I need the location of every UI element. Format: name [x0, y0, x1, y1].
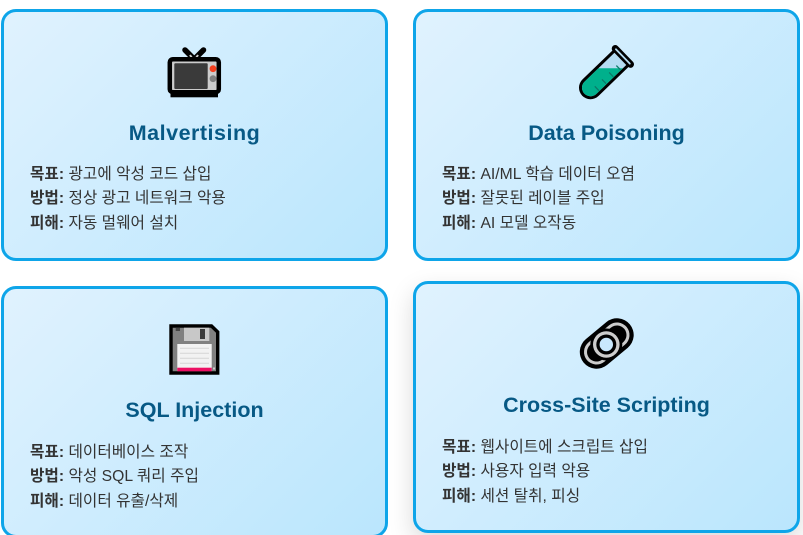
panel: Cross-Site Scripting — [413, 281, 800, 533]
icon: television — [168, 47, 222, 98]
text: SQL Injection details: 방법: 악성 SQL 쿼리 주입 — [30, 468, 199, 485]
text: SQL Injection details — [30, 444, 199, 510]
panel: Data Poisoning — [413, 9, 800, 261]
text: Data Poisoning details: 목표: AI/ML 학습 데이터 오염 — [442, 166, 635, 183]
icon: test tube — [579, 45, 634, 100]
text: Data Poisoning details: 방법: 잘못된 레이블 주입 — [442, 190, 605, 207]
text: Malvertising details — [30, 166, 226, 232]
text: Cross-Site Scripting details: 피해: 세션 탈취, 피싱 — [442, 488, 580, 505]
text: Cross-Site Scripting details — [442, 438, 648, 505]
heading: Malvertising: Malvertising — [129, 121, 260, 145]
icon: chain link — [580, 318, 634, 369]
text: SQL Injection details: 목표: 데이터베이스 조작 — [30, 444, 188, 461]
text: Malvertising details: 방법: 정상 광고 네트워크 악용 — [30, 190, 226, 207]
panel: SQL Injection — [1, 286, 388, 535]
icon: floppy disk — [169, 324, 220, 375]
panel: Malvertising — [1, 9, 388, 261]
text: Data Poisoning details: 피해: AI 모델 오작동 — [442, 215, 576, 232]
heading: Cross-Site Scripting: Cross-Site Scripting — [503, 393, 710, 417]
text: Cross-Site Scripting details: 방법: 사용자 입력 악용 — [442, 463, 590, 480]
text: Malvertising details: 목표: 광고에 악성 코드 삽입 — [30, 166, 211, 183]
heading: Data Poisoning: Data Poisoning — [528, 121, 685, 145]
text: Data Poisoning details — [442, 166, 635, 232]
text: SQL Injection details: 피해: 데이터 유출/삭제 — [30, 493, 178, 510]
text: Cross-Site Scripting details: 목표: 웹사이트에 스크립트 삽입 — [442, 439, 648, 456]
heading: SQL Injection: SQL Injection — [125, 398, 264, 422]
text: Malvertising details: 피해: 자동 멀웨어 설치 — [30, 215, 178, 232]
